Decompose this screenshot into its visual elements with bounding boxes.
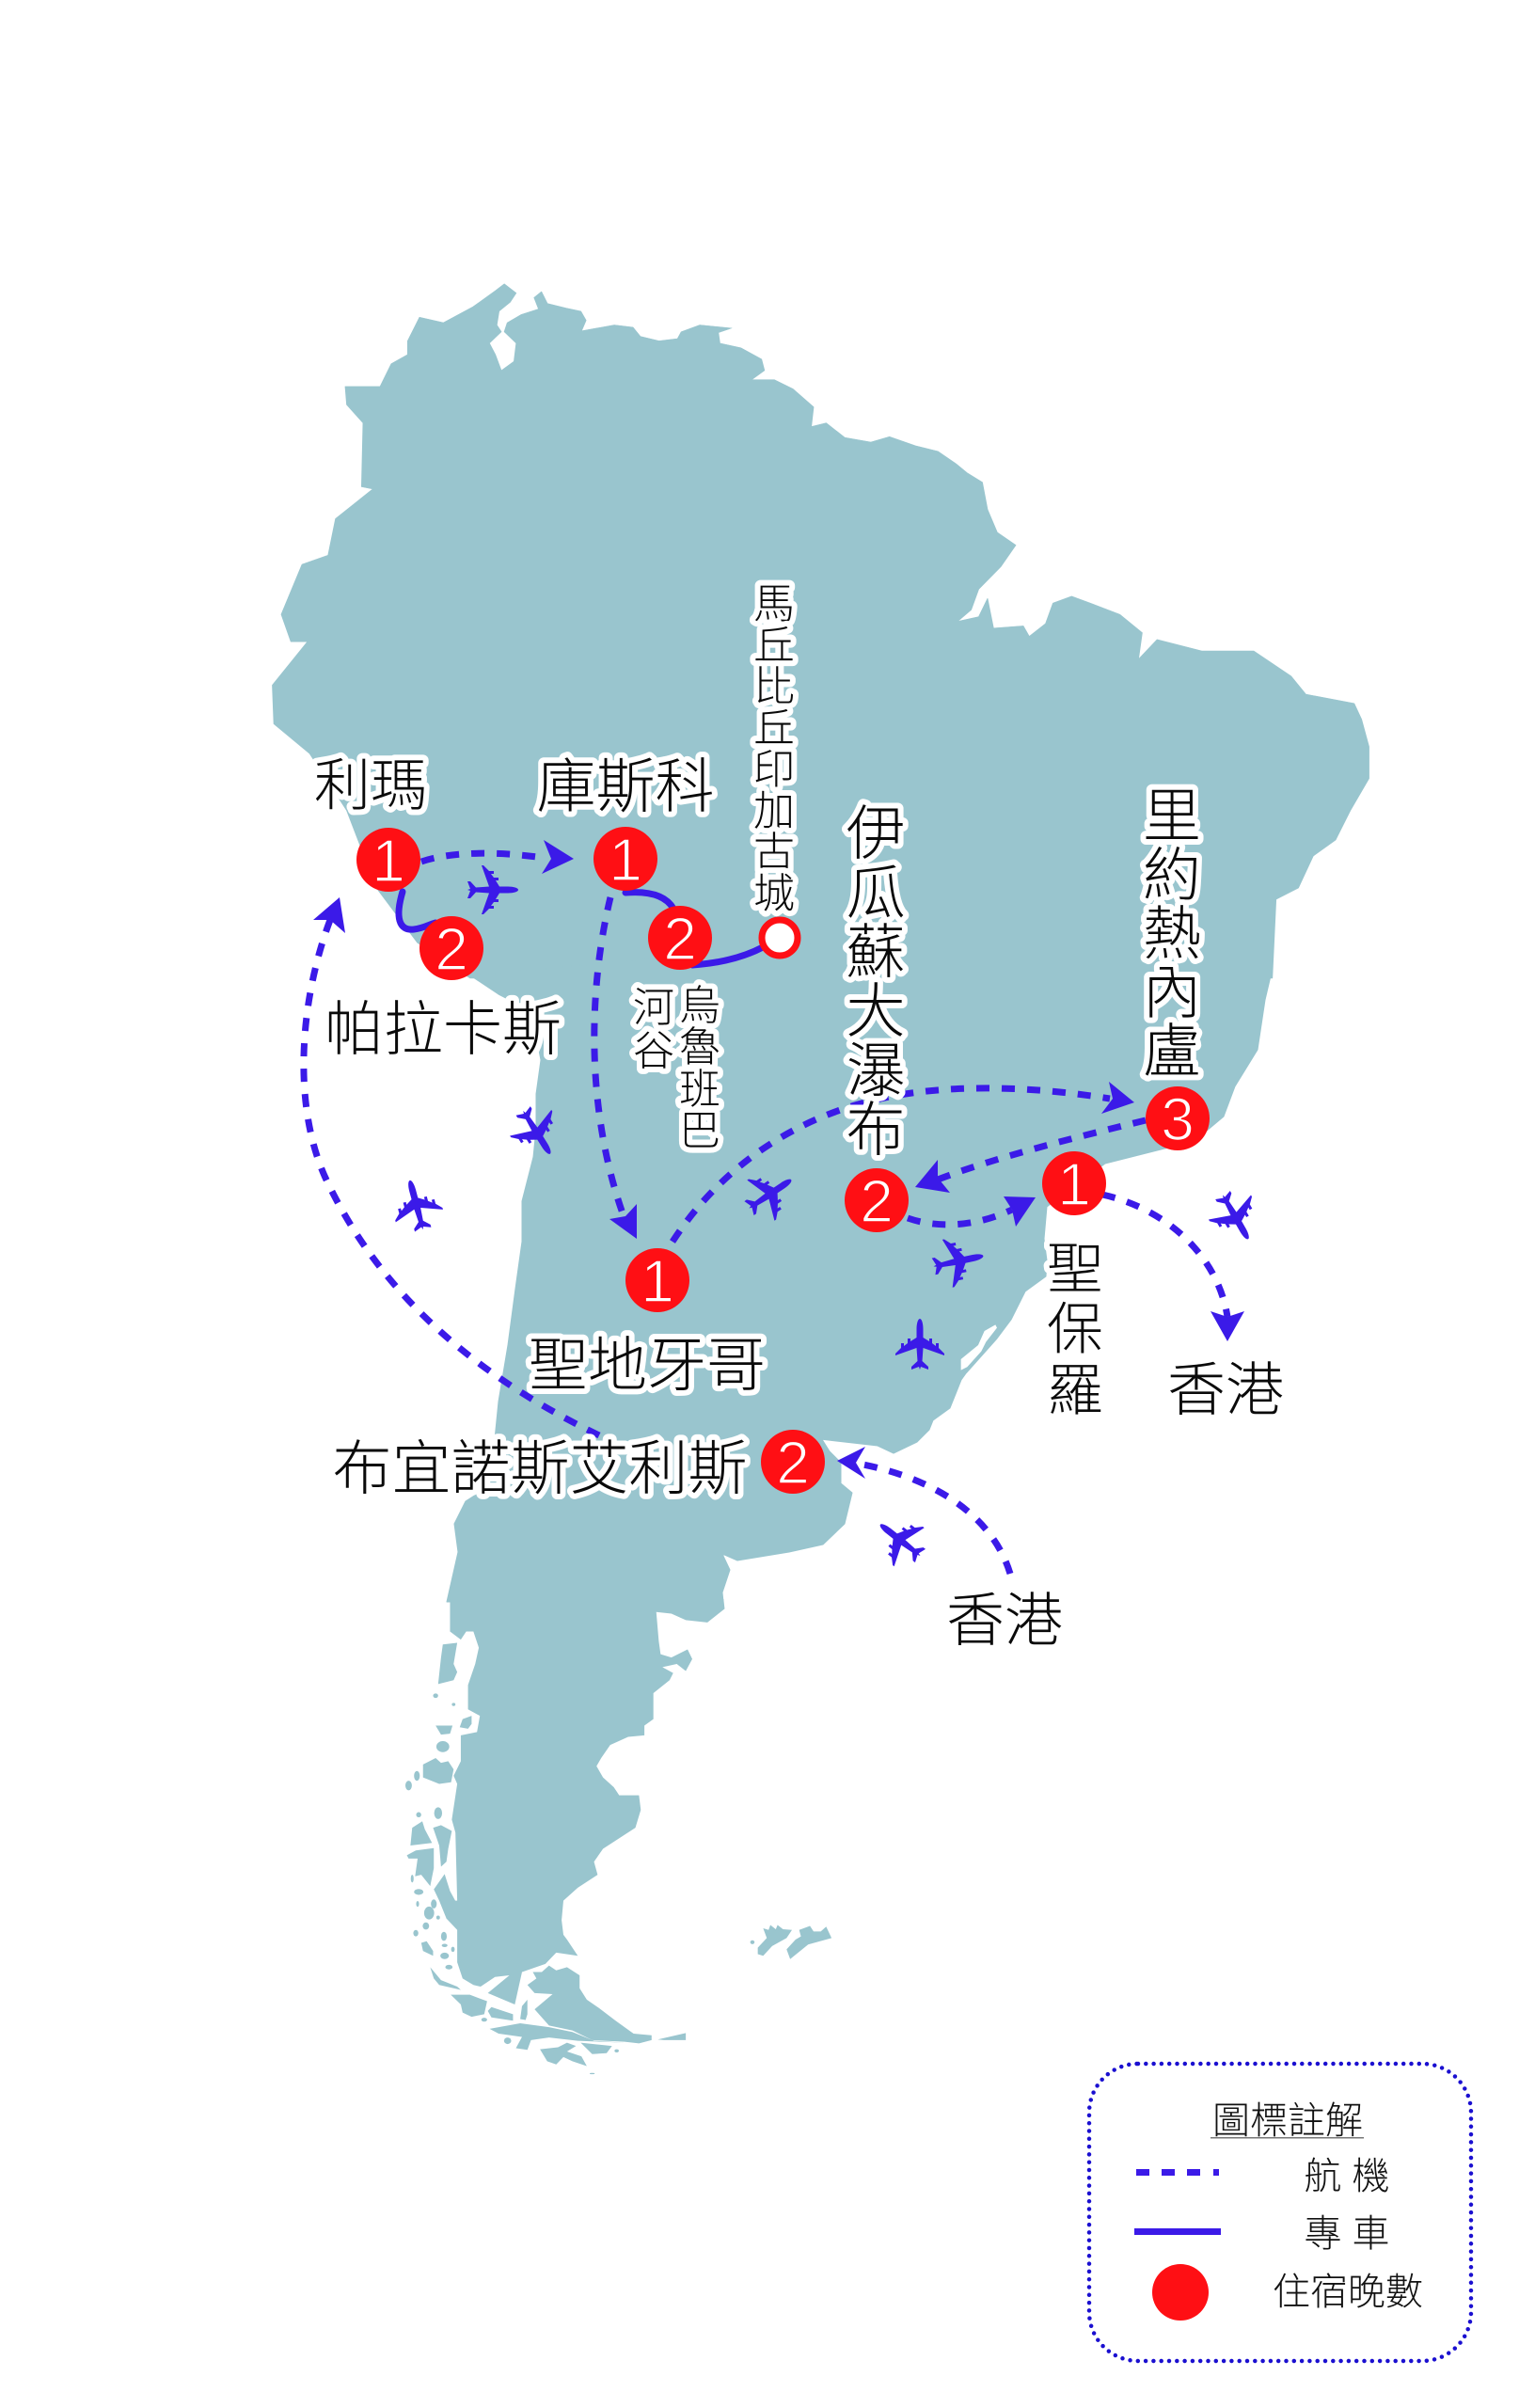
marker: Urubamba 2 nights [648, 905, 712, 973]
marker: Santiago 1 night: 1 [641, 1247, 674, 1315]
legend: flight line sample [1136, 2169, 1219, 2176]
map: lagoon [961, 1324, 997, 1370]
label: Hong Kong arrival: 香港 [946, 1589, 1063, 1654]
label: Rio de Janeiro: 約 [1143, 844, 1201, 909]
label: Urubamba: 班 [679, 1067, 720, 1113]
label: Machu Picchu: 古 [753, 830, 795, 876]
label: Machu Picchu: 加 [753, 788, 795, 834]
map: northern continent [273, 284, 1369, 978]
marker: Lima 1 night: 1 [372, 827, 405, 895]
label: Sao Paulo: 羅 [1047, 1359, 1103, 1422]
icon: airplane [736, 1160, 805, 1228]
legend: red circle sample [1152, 2264, 1209, 2321]
marker: Rio 3 nights [1146, 1085, 1210, 1153]
legend: flight text: 航 機 [1304, 2156, 1390, 2197]
drive: Lima to Paracas [399, 892, 435, 929]
stop markers: nights stayed [356, 826, 1210, 1497]
routes: flights and private car [304, 840, 1244, 1574]
marker: Buenos Aires 2 nights [761, 1429, 825, 1497]
label: Iguazu Falls: 伊 [847, 801, 905, 867]
legend: private car line sample [1134, 2228, 1221, 2235]
label: Santiago: 聖地牙哥 [529, 1333, 766, 1399]
icon: airplane [895, 1319, 944, 1370]
map: central continent [447, 941, 1273, 1602]
label: Urubamba: 魯 [679, 1024, 720, 1070]
label: Machu Picchu: 比 [753, 664, 795, 710]
flight: Hong Kong to Buenos Aires [837, 1447, 1010, 1574]
label: Iguazu Falls: 布 [847, 1098, 905, 1164]
drive: Cusco to Urubamba [625, 893, 673, 909]
flight: Cusco to Santiago [594, 897, 637, 1239]
label: Urubamba: 巴 [679, 1108, 720, 1154]
marker: Machu Picchu [762, 920, 798, 956]
icon: airplane [502, 1098, 571, 1167]
icon: airplane [865, 1505, 935, 1575]
label: Machu Picchu: 印 [753, 747, 795, 793]
label: Sacred Valley: 河 [633, 985, 674, 1031]
label: Rio de Janeiro: 里 [1143, 784, 1201, 849]
marker: Sao Paulo 1 night [1042, 1150, 1106, 1218]
label: Hong Kong departure: 香港 [1167, 1358, 1284, 1423]
map: southern continent and islands [405, 1599, 831, 2074]
marker: Paracas 2 nights: 2 [435, 915, 468, 983]
label: Machu Picchu: 馬 [753, 581, 795, 627]
label: Sacred Valley: 谷 [633, 1028, 674, 1074]
label: Iguazu Falls: 瓜 [847, 861, 905, 927]
flight: Lima to Cusco [421, 840, 574, 874]
marker: Santiago 1 night [625, 1247, 689, 1315]
flight: Iguazu to Sao Paulo [908, 1196, 1036, 1227]
icon: airplane [467, 865, 518, 914]
flight: Buenos Aires to Lima [304, 897, 599, 1435]
label: Iguazu Falls: 蘇 [847, 920, 905, 986]
legend title underline [1211, 2137, 1364, 2139]
label: Cusco: 庫斯科 [536, 754, 715, 820]
marker: Cusco 1 night [593, 826, 657, 894]
marker: Cusco 1 night: 1 [609, 826, 642, 894]
label: Paracas: 帕拉卡斯 [324, 997, 562, 1063]
flight: Santiago to Rio [673, 1082, 1134, 1242]
icon: airplane [1201, 1182, 1270, 1251]
drive: Urubamba to Machu Picchu [692, 947, 763, 965]
icon: airplane [387, 1174, 447, 1236]
panel: legend [1089, 2064, 1471, 2361]
label: Machu Picchu: 丘 [753, 705, 795, 752]
map: South America [273, 284, 1369, 2074]
marker: Buenos Aires 2 nights: 2 [776, 1429, 810, 1497]
marker: Paracas 2 nights [419, 915, 483, 983]
marker: Urubamba 2 nights: 2 [663, 905, 697, 973]
label: Urubamba: 烏 [679, 983, 720, 1029]
legend border [1089, 2064, 1471, 2361]
label: Sao Paulo: 聖 [1047, 1238, 1103, 1301]
label: Machu Picchu: 城 [753, 871, 795, 917]
label: Sao Paulo: 保 [1047, 1298, 1103, 1361]
legend: nights text: 住宿晚數 [1273, 2272, 1423, 2313]
flight: Rio to Iguazu [915, 1120, 1146, 1193]
label: Machu Picchu: 丘 [753, 623, 795, 669]
label: Rio de Janeiro: 內 [1143, 961, 1201, 1026]
marker: Sao Paulo 1 night: 1 [1057, 1150, 1091, 1218]
icon: airplane [928, 1232, 989, 1291]
label: Iguazu Falls: 瀑 [847, 1038, 905, 1104]
label: Buenos Aires: 布宜諾斯艾利斯 [333, 1436, 747, 1502]
flight: Sao Paulo to Hong Kong [1102, 1195, 1244, 1341]
legend: private car text: 專 車 [1304, 2213, 1390, 2255]
label: Lima: 利瑪 [314, 754, 427, 817]
label: Iguazu Falls: 大 [847, 979, 905, 1045]
label: Rio de Janeiro: 熱 [1143, 902, 1201, 967]
label: Rio de Janeiro: 盧 [1143, 1020, 1201, 1085]
city labels [314, 581, 1284, 1654]
marker: Rio 3 nights: 3 [1161, 1085, 1195, 1153]
marker: Iguazu 2 nights [845, 1167, 909, 1235]
marker: Iguazu 2 nights: 2 [860, 1167, 894, 1235]
legend title: 圖標註解 [1212, 2100, 1363, 2142]
icons: airplanes [387, 865, 1270, 1575]
marker: Lima 1 night [356, 827, 420, 895]
